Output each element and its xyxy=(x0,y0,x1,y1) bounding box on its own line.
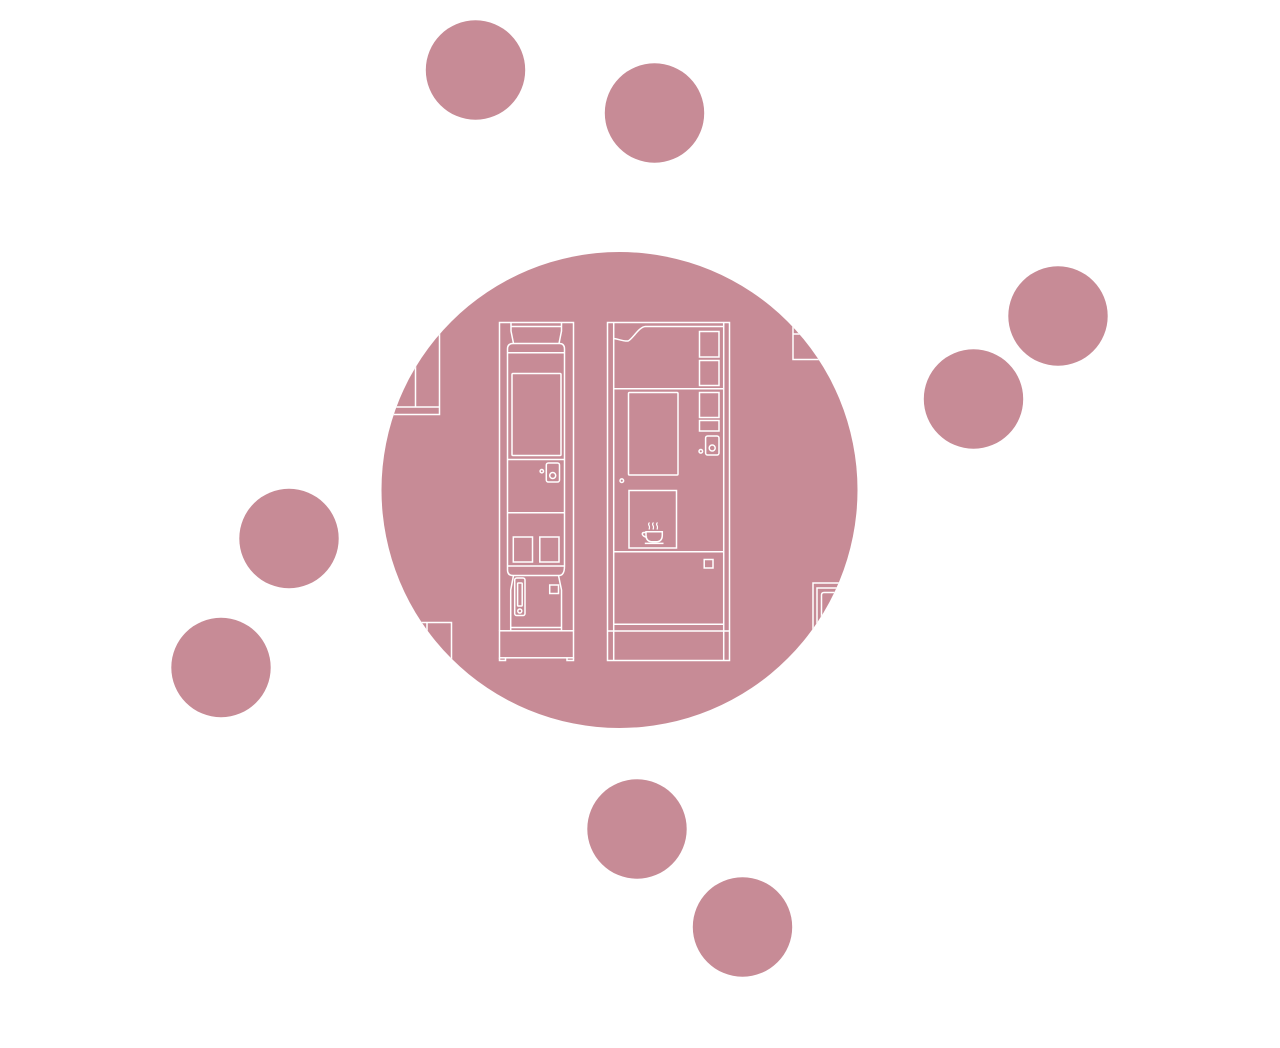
circle 8 xyxy=(693,877,792,977)
top wave xyxy=(614,326,724,341)
circle 5 xyxy=(239,489,339,588)
dispensing window xyxy=(629,490,676,548)
icon: coffee cup xyxy=(642,522,664,543)
machine fragment: upper left xyxy=(394,334,440,416)
dispenser slot xyxy=(518,583,522,606)
small circles xyxy=(171,20,1108,977)
left vending machine xyxy=(500,322,574,660)
payment button xyxy=(540,470,544,473)
circle 2 xyxy=(605,63,704,163)
circle 1 xyxy=(426,20,525,120)
payment panel xyxy=(546,463,560,482)
product window left xyxy=(513,537,532,562)
base xyxy=(500,631,574,658)
circle 3 xyxy=(1008,266,1108,366)
circle 7 xyxy=(587,779,687,879)
central circle xyxy=(382,252,858,728)
hopper xyxy=(511,322,562,344)
feet xyxy=(500,658,574,660)
small square xyxy=(704,560,713,568)
machine fragment: lower left xyxy=(421,622,452,660)
door button xyxy=(620,479,624,483)
clipped background machines xyxy=(380,320,850,670)
divider lines xyxy=(608,389,730,631)
product window right xyxy=(540,537,559,562)
circle 4 xyxy=(924,349,1023,449)
dispenser handle xyxy=(515,578,525,616)
machine fragment: lower right xyxy=(812,582,839,630)
payment panel xyxy=(706,436,719,455)
payment dial xyxy=(709,445,715,451)
small square xyxy=(550,585,558,594)
lower section xyxy=(511,576,562,630)
outer cabinet xyxy=(608,322,730,660)
payment button xyxy=(699,450,703,453)
outer cabinet xyxy=(500,322,574,630)
top panels xyxy=(700,332,719,357)
inner verticals xyxy=(614,322,724,660)
side panels xyxy=(700,392,719,418)
screen xyxy=(628,392,678,475)
payment dial xyxy=(550,472,556,478)
right vending machine xyxy=(608,322,730,660)
screen xyxy=(512,374,561,456)
circle 6 xyxy=(171,618,271,717)
body xyxy=(508,344,564,576)
dispenser dot xyxy=(518,609,522,613)
machine fragment: upper right xyxy=(792,326,819,360)
